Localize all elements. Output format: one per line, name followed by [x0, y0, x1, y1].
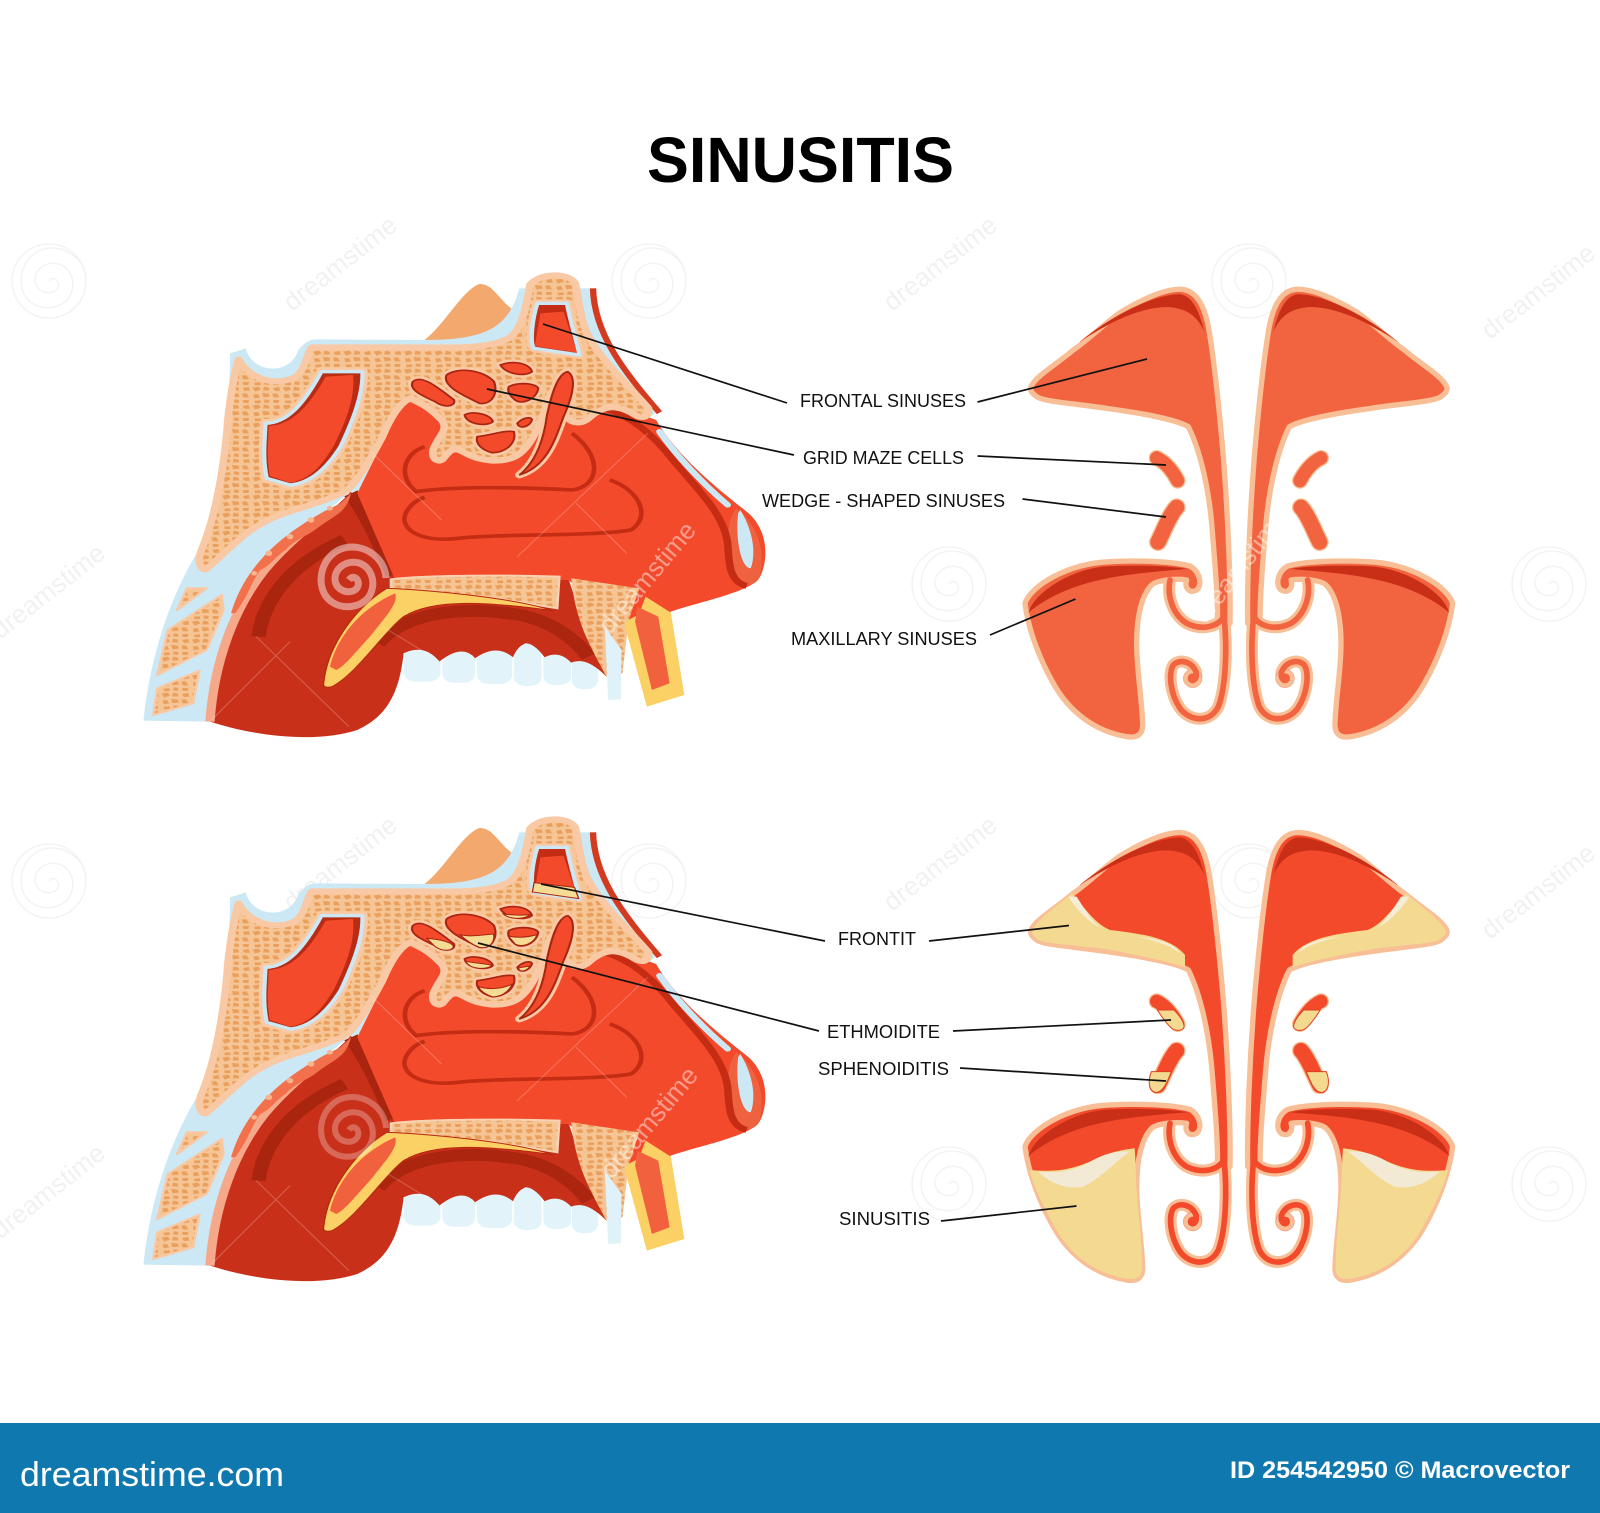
leader line: ethmoidite left: [478, 943, 819, 1031]
label: ethmoidite: ETHMOIDITE: [827, 1022, 940, 1042]
label: sphenoiditis: SPHENOIDITIS: [818, 1059, 949, 1079]
leader line: grid maze cells right: [978, 456, 1166, 465]
label: wedge-shaped sinuses: WEDGE - SHAPED SINUSES: [762, 491, 1005, 511]
left inflamed sinuses: [1025, 833, 1230, 1280]
label: maxillary sinuses: MAXILLARY SINUSES: [791, 629, 977, 649]
watermark text: [592, 503, 1293, 1184]
spiral watermark over upper head: [321, 547, 386, 607]
leader line: frontit right: [929, 926, 1069, 941]
leader line: sinusitis: [941, 1206, 1076, 1221]
faint grey watermark text: dreamstime: [277, 809, 403, 917]
leader line: frontit left: [541, 884, 825, 941]
faint grey watermark text: dreamstime: [1475, 837, 1600, 945]
right healthy sinuses: [1248, 289, 1453, 737]
watermark text: dreamstime: [594, 1061, 704, 1184]
label: frontal sinuses: FRONTAL SINUSES: [800, 391, 966, 411]
spiral watermark over lower head: [321, 1097, 386, 1157]
pus deposits in head sinuses: [427, 883, 579, 997]
right inflamed sinuses: [1248, 833, 1453, 1280]
faint grey watermark text: [0, 209, 1600, 1245]
footer id credit: ID 254542950 © Macrovector: [1230, 1457, 1570, 1484]
left healthy sinuses: [1025, 289, 1230, 737]
label: sinusitis: SINUSITIS: [839, 1209, 930, 1229]
label: grid maze cells: GRID MAZE CELLS: [803, 448, 964, 468]
leader line: wedge-shaped sinuses: [1022, 499, 1166, 517]
inflamed side-view head anatomy: [143, 819, 765, 1281]
leader line: sphenoiditis: [960, 1068, 1166, 1081]
leader line: maxillary sinuses: [990, 599, 1076, 635]
inflamed frontal sinus diagram: [1025, 833, 1453, 1280]
healthy frontal sinus diagram: [1025, 289, 1453, 737]
faint grey watermark text: dreamstime: [1475, 237, 1600, 345]
healthy side-view head anatomy: [143, 275, 765, 737]
watermark spirals: [12, 244, 1586, 1221]
footer band: [0, 1423, 1600, 1513]
leader line: grid maze cells left: [487, 389, 794, 455]
title: SINUSITIS: [647, 124, 954, 196]
leader line: frontal sinuses right: [978, 359, 1147, 402]
faint grey watermark text: dreamstime: [877, 209, 1003, 317]
faint grey watermark text: dreamstime: [877, 809, 1003, 917]
leader line: frontal sinuses left: [543, 324, 787, 403]
label: frontit: FRONTIT: [838, 929, 916, 949]
faint grey watermark text: dreamstime: [277, 209, 403, 317]
leader line: ethmoidite right: [953, 1020, 1171, 1031]
watermark text: dreamstime: [1186, 503, 1293, 629]
footer logo: dreamstime.com: [20, 1456, 284, 1494]
watermark text: dreamstime: [592, 516, 702, 639]
